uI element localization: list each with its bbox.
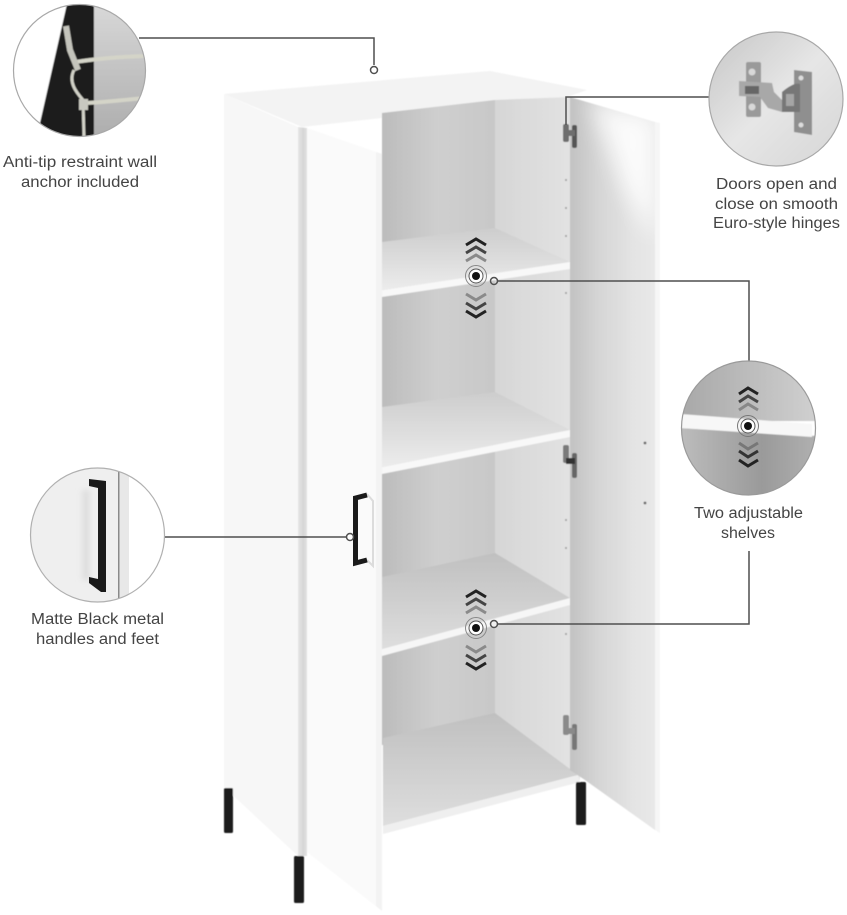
label: shelves xyxy=(694,505,803,542)
label: hinges: close on smooth xyxy=(715,196,838,213)
label: shelves: Two adjustable xyxy=(694,505,803,522)
inset: wall anchor xyxy=(13,4,147,138)
right door xyxy=(570,97,660,833)
callout line: upper shelf xyxy=(490,278,749,362)
label: anti-tip: anchor included xyxy=(21,174,139,191)
door handle xyxy=(356,494,373,566)
callout line: lower shelf xyxy=(490,551,749,628)
label: anti-tip xyxy=(3,154,157,191)
back wall xyxy=(382,100,495,745)
gap between side panel and door xyxy=(298,127,307,856)
label: hinges: Doors open and xyxy=(716,176,837,193)
leg: front xyxy=(294,856,304,903)
label: hinges xyxy=(713,176,840,232)
callout line: anti-tip xyxy=(139,38,378,74)
label: shelves: shelves xyxy=(721,525,775,542)
label: handle xyxy=(31,611,164,648)
shelf pin holes xyxy=(565,179,567,635)
right inner wall xyxy=(495,97,580,780)
shelf 2 xyxy=(382,392,570,474)
hinge: bottom xyxy=(563,715,577,750)
inset: hinge xyxy=(709,32,843,166)
left door xyxy=(307,128,382,911)
label: handle: handles and feet xyxy=(36,631,160,648)
upper shelf adjust marker xyxy=(466,239,486,317)
callout line: hinges xyxy=(566,97,709,125)
shelf 3 xyxy=(382,553,570,656)
lower shelf adjust marker xyxy=(466,591,486,669)
leg: rear left xyxy=(224,788,233,833)
label: anti-tip: Anti-tip restraint wall xyxy=(3,154,157,171)
bottom shelf xyxy=(383,713,580,834)
shelf 1 xyxy=(382,228,570,297)
label: handle: Matte Black metal xyxy=(31,611,164,628)
inset: adjustable shelf xyxy=(681,361,817,496)
cabinet xyxy=(224,71,660,911)
label: hinges: Euro-style hinges xyxy=(713,215,840,232)
cabinet left side panel xyxy=(224,94,298,856)
callout line: handle xyxy=(164,534,354,540)
cabinet top xyxy=(224,71,587,127)
leg: right xyxy=(576,782,586,825)
hinge: top xyxy=(563,124,577,148)
inset: handle xyxy=(30,468,165,602)
hinge: middle xyxy=(563,445,577,478)
